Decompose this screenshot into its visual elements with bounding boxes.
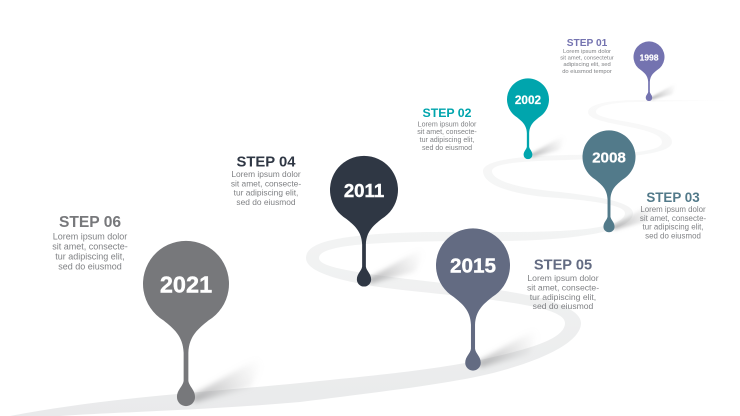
- text block: step 01: do eiusmod tempor: [562, 69, 612, 75]
- text block: step 04: sit amet, consecte-: [231, 178, 301, 188]
- winding road: [10, 98, 740, 416]
- text block: step 01: Lorem ipsum dolor: [563, 49, 611, 55]
- text block: step 06: Lorem ipsum dolor: [53, 232, 127, 242]
- text block: step 04: [231, 154, 301, 207]
- text block: step 01: STEP 01: [567, 38, 608, 49]
- text block: step 05: sit amet, consecte-: [527, 282, 599, 292]
- text block: step 02: sed do eiusmod: [422, 144, 472, 152]
- text block: step 01: adipiscing elit, sed: [563, 62, 611, 68]
- text block: step 06: tur adipiscing elit,: [55, 252, 125, 262]
- year label: 2002: 2002: [515, 93, 542, 107]
- text block: step 06: [52, 214, 128, 272]
- text block: step 03: Lorem ipsum dolor: [640, 205, 706, 214]
- text block: step 03: sit amet, consecte-: [640, 214, 706, 223]
- text block: step 01: [560, 38, 614, 75]
- text block: step 02: Lorem ipsum dolor: [418, 120, 477, 128]
- text block: step 01: sit amet, consectetur: [560, 56, 614, 62]
- pin: 2011: [330, 156, 429, 287]
- text block: step 03: [640, 190, 706, 240]
- text block: step 06: sit amet, consecte-: [52, 242, 128, 252]
- text block: step 05: Lorem ipsum dolor: [527, 273, 599, 283]
- year label: 1998: 1998: [639, 52, 659, 62]
- text block: step 05: STEP 05: [534, 258, 592, 274]
- text block: step 02: tur adipiscing elit,: [420, 136, 474, 144]
- text block: step 05: [527, 258, 599, 311]
- year label: 2008: 2008: [592, 150, 626, 166]
- text block: step 02: STEP 02: [422, 106, 472, 120]
- text block: step 05: tur adipiscing elit,: [530, 292, 596, 302]
- text block: step 06: STEP 06: [59, 214, 121, 231]
- pin: 2002: [507, 78, 568, 159]
- text block: step 06: sed do eiusmod: [58, 262, 122, 272]
- year label: 2021: 2021: [160, 272, 212, 298]
- pin: 1998: [634, 41, 678, 101]
- pin: 2015: [436, 228, 543, 371]
- pin: 2021: [143, 241, 268, 406]
- year label: 2015: 2015: [450, 254, 496, 278]
- text block: step 04: sed do eiusmod: [236, 197, 296, 207]
- text block: step 02: [417, 106, 477, 152]
- text block: step 04: tur adipiscing elit,: [234, 188, 298, 198]
- text block: step 04: Lorem ipsum dolor: [231, 169, 301, 179]
- text block: step 03: tur adipiscing elit,: [643, 223, 703, 232]
- text block: step 02: sit amet, consecte-: [417, 128, 477, 136]
- text block: step 05: sed do eiusmod: [533, 301, 594, 311]
- pin: 2008: [582, 130, 659, 232]
- text block: step 04: STEP 04: [237, 154, 296, 170]
- text block: step 03: sed do eiusmod: [645, 231, 701, 240]
- text block: step 03: STEP 03: [646, 190, 700, 205]
- year label: 2011: 2011: [344, 180, 384, 201]
